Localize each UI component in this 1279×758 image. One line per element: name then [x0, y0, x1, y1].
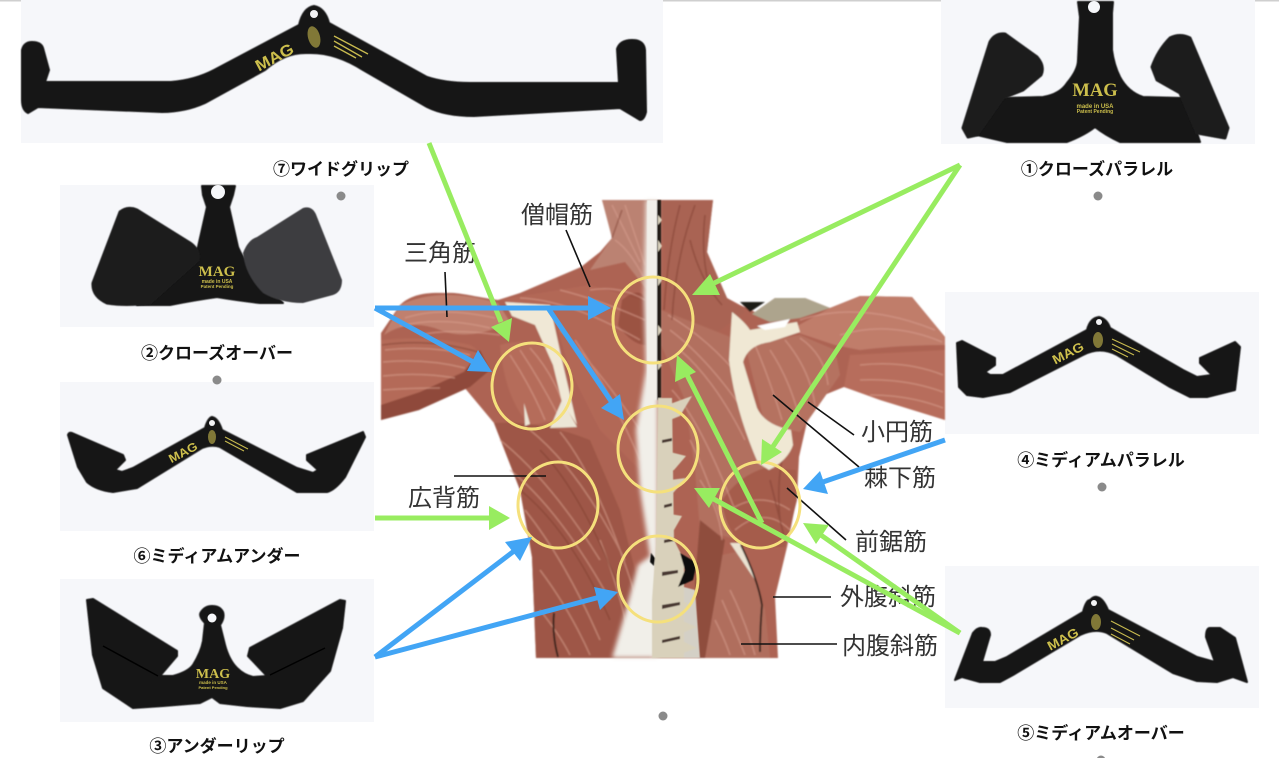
panel: under lip handle: Patent Pending [198, 685, 228, 690]
muscle labels with leader lines: 外腹斜筋 [840, 584, 936, 611]
caption: close over: ②クローズオーバー [141, 343, 293, 363]
panel: under lip handle: made in USA [199, 680, 228, 685]
green arrows [375, 143, 960, 633]
panel: close over handle: Patent Pending [201, 284, 234, 289]
panel: medium under handle: MAG [166, 439, 200, 466]
caption: medium parallel: ④ミディアムパラレル [1017, 450, 1185, 470]
panel: wide grip handle: MAG [252, 40, 297, 75]
panel: close parallel handle: MAG [1072, 81, 1118, 101]
anatomy: central white tendon [612, 200, 658, 658]
anatomy: back muscles [381, 200, 945, 658]
panel: close over handle: made in USA [202, 279, 233, 285]
muscle labels with leader lines [404, 202, 938, 660]
muscle labels with leader lines: 前鋸筋 [855, 529, 927, 556]
panel: close parallel handle [941, 0, 1255, 144]
panel: close parallel handle: Patent Pending [1077, 109, 1113, 115]
panel: close parallel handle: made in USA [1076, 104, 1114, 110]
caption: close parallel: ①クローズパラレル [1021, 159, 1173, 179]
panel: medium parallel handle [945, 292, 1259, 434]
small grey dots [212, 192, 1106, 758]
panel: close over handle: MAG [199, 264, 236, 280]
anatomy: spine and vertebrae [647, 200, 700, 658]
panel: wide grip handle [21, 0, 663, 143]
panel: medium over handle: MAG [1045, 625, 1081, 653]
muscle labels with leader lines: 小円筋 [861, 419, 933, 446]
panel: medium over handle [945, 566, 1259, 708]
panel: under lip handle [60, 579, 374, 722]
panel: close over handle [60, 185, 374, 327]
panel: under lip handle: MAG [196, 667, 230, 682]
yellow target circles [492, 277, 800, 622]
caption: under lip: ③アンダーリップ [149, 736, 285, 756]
muscle labels with leader lines: 内腹斜筋 [842, 633, 938, 660]
muscle labels with leader lines: 棘下筋 [864, 465, 936, 492]
panel: medium under handle [60, 382, 374, 531]
muscle labels with leader lines: 僧帽筋 [521, 202, 593, 229]
caption: wide grip: ⑦ワイドグリップ [273, 159, 409, 179]
blue arrows [375, 296, 945, 657]
caption: medium over: ⑤ミディアムオーバー [1017, 723, 1185, 743]
muscle labels with leader lines: 三角筋 [404, 240, 476, 267]
muscle labels with leader lines: 広背筋 [408, 485, 480, 512]
caption: medium under: ⑥ミディアムアンダー [134, 546, 300, 566]
panel: medium parallel handle: MAG [1050, 339, 1086, 367]
